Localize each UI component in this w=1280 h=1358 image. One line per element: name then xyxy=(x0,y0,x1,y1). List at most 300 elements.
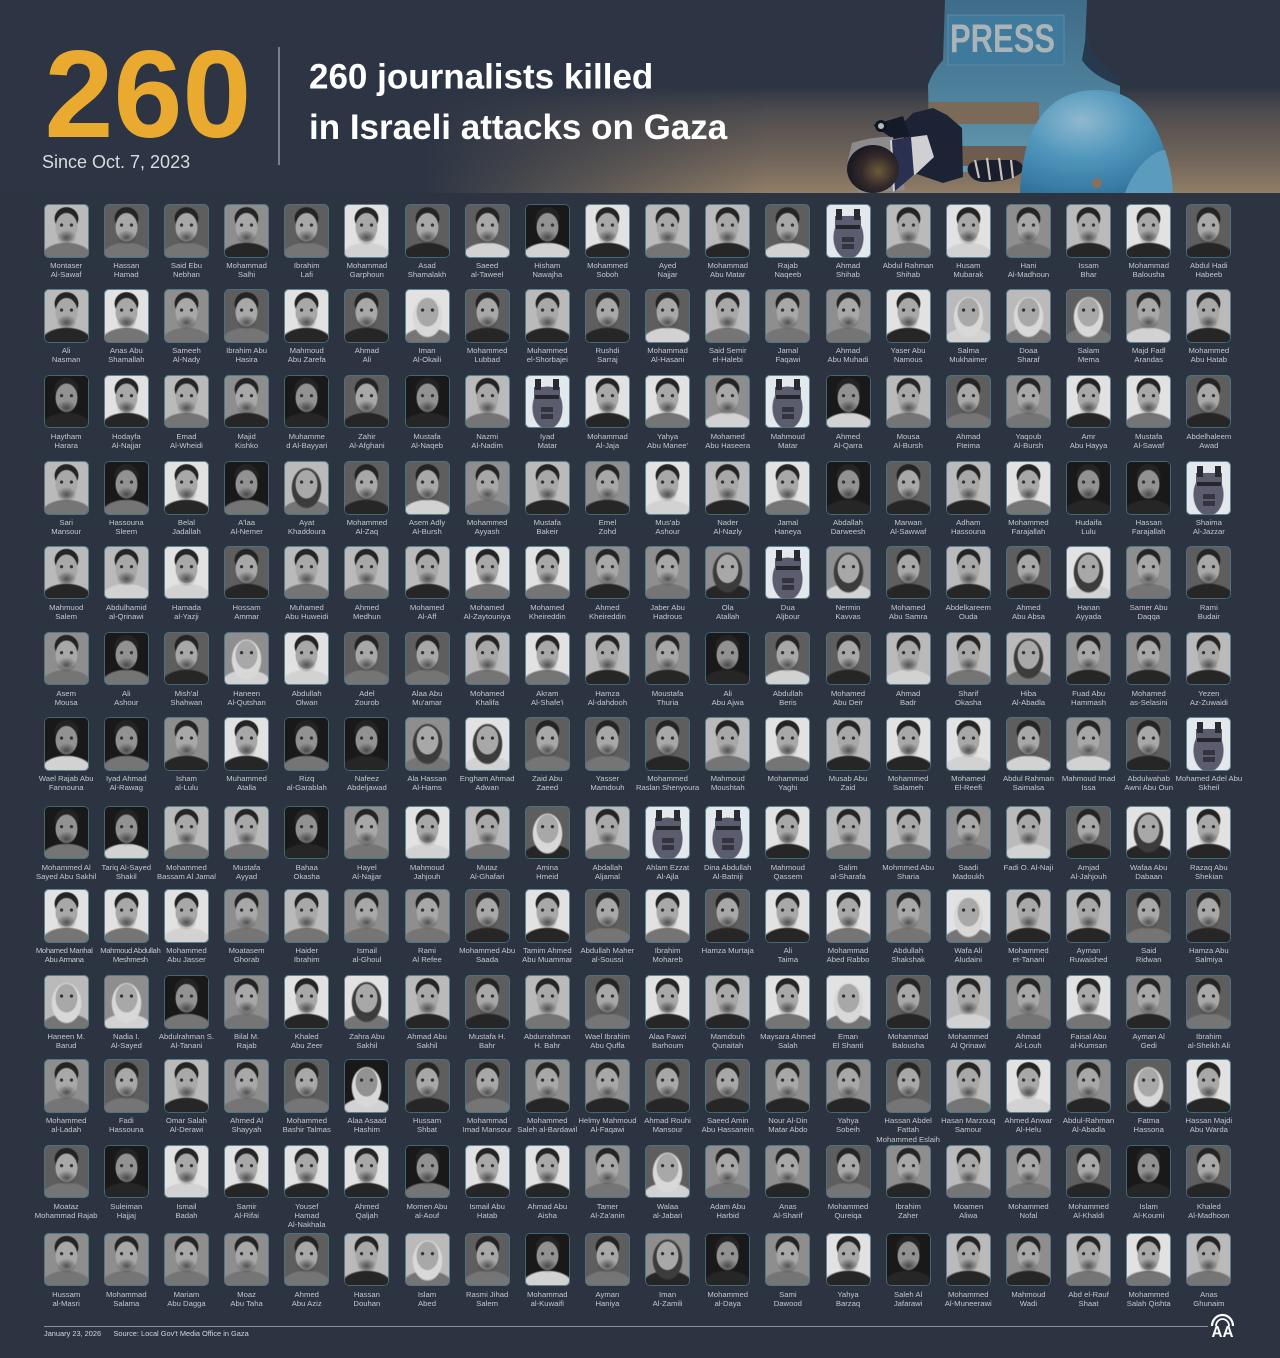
text: Al-Nakhala xyxy=(288,1220,326,1229)
portrait: Mohamed Khalifa: Mohamed xyxy=(470,688,504,698)
text: Al-Abadla xyxy=(1012,698,1045,707)
portrait: Suleiman Hajjaj xyxy=(96,1144,156,1214)
text: Shahwan xyxy=(170,698,202,707)
portrait: Muhamed Abu Huweidi: Muhamed xyxy=(290,602,324,612)
portrait: Abdallah Darweesh: Abdallah xyxy=(833,518,863,527)
portrait: Isham al-Lulu xyxy=(156,717,217,787)
portrait: Shaima Al-Jazzar xyxy=(1179,461,1239,531)
portrait: Moustafa Thuria xyxy=(638,632,698,702)
portrait: Hamada al-Yazji xyxy=(156,546,217,616)
portrait: Mohammad al-Kuwaifi: Mohammad xyxy=(527,1290,568,1298)
text: Farajallah xyxy=(1012,527,1045,536)
portrait: Bilal M. Rajab xyxy=(217,975,277,1045)
text: Sleem xyxy=(115,527,137,536)
portrait: Abd el-Rauf Shaat xyxy=(1058,1232,1119,1302)
portrait: Mahmoud Matar xyxy=(758,374,818,444)
portrait: Anas Abu Shamallah xyxy=(104,289,149,364)
portrait: Ayat Khaddoura xyxy=(277,461,337,531)
portrait: Mohamed as-Selasini xyxy=(1119,632,1179,702)
text: el-Shorbajei xyxy=(527,355,568,364)
portrait: Yasser Mamdouh: Yasser xyxy=(596,774,619,783)
text: Raslan Shenyoura xyxy=(636,783,699,792)
portrait: Abdallah Darweesh xyxy=(818,461,878,531)
portrait: Mohammed Al-Khaldi: Mohammed xyxy=(1068,1202,1109,1210)
text: El Shanti xyxy=(833,1041,863,1050)
portrait: Haytham Harara: Haytham xyxy=(51,432,82,440)
portrait: Mohammed Ayyash xyxy=(457,461,517,531)
portrait: Walaa al-Jabari xyxy=(638,1144,698,1214)
text: Nasman xyxy=(52,355,80,364)
text: et-Tanani xyxy=(1013,955,1044,964)
portrait: Hanan Ayyada: Hanan xyxy=(1077,602,1100,612)
portrait: Mohammed Al-Muneerawi xyxy=(938,1232,998,1302)
text: Sarraj xyxy=(597,355,618,364)
portrait: Tamer Al-Za'anin xyxy=(577,1144,638,1214)
portrait: Hussam al-Masri: Hussam xyxy=(52,1290,80,1298)
text: Abed Rabbo xyxy=(827,955,869,964)
portrait: Jamal Faqawi xyxy=(765,289,810,364)
text: Arandas xyxy=(1134,355,1163,364)
portrait: Mohammed Abu Hatab: Mohammed xyxy=(1189,346,1229,355)
portrait: Mohammad Balousha xyxy=(878,975,938,1045)
text: al-Yazji xyxy=(174,612,199,621)
portrait: Mohammad Yaghi xyxy=(758,717,818,787)
portrait: Iman Al-Zamili: Iman xyxy=(659,1290,676,1298)
portrait: Islam Al-Koumi: Islam xyxy=(1140,1202,1158,1210)
portrait row 4 xyxy=(36,461,1239,531)
text: Ruwaished xyxy=(1070,955,1108,964)
text: Al-Batniji xyxy=(713,872,743,881)
text: Hadrous xyxy=(653,612,682,621)
text: Abu Hatab xyxy=(1191,355,1227,364)
text: Ashour xyxy=(655,527,680,536)
portrait: Ali Nasman xyxy=(44,289,89,364)
portrait: Jamal Faqawi: Jamal xyxy=(778,346,798,355)
portrait: Nafeez Abdeljawad: Nafeez xyxy=(355,774,379,783)
portrait: Amina Hmeid: Amina xyxy=(536,862,558,872)
text: Shakil xyxy=(116,872,137,881)
text: Abu Manee' xyxy=(647,441,688,450)
portrait: Samir Al-Rifai: Samir xyxy=(237,1202,257,1210)
text: Barhoum xyxy=(652,1041,683,1050)
text: Al-Faqawi xyxy=(590,1125,625,1134)
portrait: Fadi Hassouna: Fadi xyxy=(119,1116,134,1125)
text: Soboh xyxy=(596,270,619,279)
portrait: Ahmed Al-Qarra xyxy=(818,374,878,444)
text: al-Masri xyxy=(52,1299,80,1308)
portrait: Rami Budair xyxy=(1179,546,1239,616)
portrait: Mohammed Raslan Shenyoura: Mohammed xyxy=(647,774,688,783)
portrait: Moatasem Ghorab xyxy=(217,889,277,959)
portrait: Haneen Al-Qutshan xyxy=(217,632,277,702)
text: Douhan xyxy=(353,1299,380,1308)
text: Fattah xyxy=(897,1125,919,1134)
text: Mohammad Rajab xyxy=(35,1211,98,1220)
text: Al-Jahjouh xyxy=(1070,872,1107,881)
portrait: Anas Al-Sharif: Anas xyxy=(779,1202,797,1210)
portrait: Anas Ghunaim xyxy=(1179,1232,1239,1302)
text: Abu Muhadi xyxy=(827,355,868,364)
text: al-Soussi xyxy=(592,955,623,964)
portrait: Alaa Fawzi Barhoum: Alaa Fawzi xyxy=(649,1032,686,1041)
portrait: Mohammed Saleh al-Bardawil xyxy=(517,1059,577,1129)
portrait: Mohammed Qureiqa xyxy=(818,1144,878,1214)
portrait: Sari Mansour xyxy=(36,461,96,531)
portrait: Ahmad Fteima xyxy=(938,374,998,444)
text: Fteima xyxy=(957,441,980,450)
portrait: Mohammed Raslan Shenyoura xyxy=(638,717,698,787)
portrait: Abd el-Rauf Shaat: Abd el-Rauf xyxy=(1068,1290,1109,1298)
text: Shihab xyxy=(836,270,860,279)
portrait: Mohammad Al-Hasani xyxy=(645,289,690,364)
portrait: Ismail Badah xyxy=(156,1144,217,1214)
text: Adwan xyxy=(475,783,499,792)
portrait: Ahmad Abu Muhadi xyxy=(826,289,871,364)
portrait: Alaa Asaad Hashim xyxy=(337,1059,397,1129)
text: Aliwa xyxy=(959,1211,977,1220)
portrait: Asem Mousa xyxy=(36,632,96,702)
portrait: Mohammed Al-Zaq: Mohammed xyxy=(347,518,387,527)
portrait: Mohammed Salah Qishta xyxy=(1119,1232,1179,1302)
portrait: Mahmoud Moushtah: Mahmoud xyxy=(711,774,745,783)
portrait: Abdul Rahman Saimalsa xyxy=(998,717,1058,787)
text: Olwan xyxy=(296,698,318,707)
portrait: Iman Al-Okaili: Iman xyxy=(418,346,436,355)
portrait: Salma Mukhaimer: Salma xyxy=(957,346,979,355)
portrait: Ahmad Abu Aisha xyxy=(517,1144,577,1214)
text: Mohammed Eslaih xyxy=(876,1135,940,1144)
text: Al-Koumi xyxy=(1133,1211,1164,1220)
portrait: Asem Adly Al-Bursh xyxy=(397,461,457,531)
portrait: Mohamed Abu Haseera xyxy=(698,374,758,444)
portrait: Iyad Ahmad Al-Rawag: Iyad Ahmad xyxy=(106,774,147,783)
portrait: Mohammed Bassam Al Jamal xyxy=(156,806,217,876)
text: al-Aouf xyxy=(415,1211,439,1220)
portrait: Alaa Fawzi Barhoum xyxy=(638,975,698,1045)
portrait: Yaser Abu Namous xyxy=(886,289,931,364)
portrait: Hassan Douhan xyxy=(337,1232,397,1302)
portrait: Dua Aljbour: Dua xyxy=(781,602,795,612)
portrait: Mohammed Al Sayed Abu Sakhil: Mohammed Al xyxy=(42,862,91,872)
portrait: Nermin Kavvas: Nermin xyxy=(836,602,860,612)
portrait: Ismail Abu Hatab: Ismail Abu xyxy=(469,1202,505,1210)
portrait: Montaser Al-Sawaf: Montaser xyxy=(50,261,82,270)
text: Abu Dagga xyxy=(167,1299,206,1308)
text: Al-Helu xyxy=(1016,1125,1041,1134)
portrait: Yahya Sobeih: Yahya xyxy=(837,1116,859,1125)
portrait: Hamza Murtaja xyxy=(698,889,758,959)
portrait: Zahra Abu Sakhil: Zahra Abu xyxy=(349,1032,385,1041)
portrait: Moatasem Ghorab: Moatasem xyxy=(229,946,265,955)
portrait: Mohammed Lubbad xyxy=(465,289,510,364)
portrait: Yezen Az-Zuwaidi xyxy=(1179,632,1239,702)
portrait: Marwan Al-Sawwaf xyxy=(878,461,938,531)
portrait: Rami Al Refee: Rami xyxy=(418,946,436,955)
portrait: Rami Budair: Rami xyxy=(1200,602,1218,612)
portrait: Muhammed Al-Bayyari xyxy=(277,374,337,444)
portrait: Abdul Hadi Habeeb: Abdul Hadi xyxy=(1190,261,1228,270)
text: Kheireddin xyxy=(589,612,626,621)
text: Hassouna xyxy=(951,527,986,536)
image: helmet xyxy=(1020,90,1173,193)
text: al-Daya xyxy=(714,1299,741,1308)
portrait: Said Ridwan xyxy=(1119,889,1179,959)
portrait: Anas Abu Shamallah: Anas Abu xyxy=(110,346,143,355)
text: Hassouna xyxy=(109,1125,144,1134)
portrait: Abdelkareem Ouda: Abdelkareem xyxy=(946,602,991,612)
portrait: Moustafa Thuria: Moustafa xyxy=(652,688,683,698)
text: Skheil xyxy=(1198,783,1219,792)
text: Salah Qishta xyxy=(1127,1299,1171,1308)
text: Al-Zamili xyxy=(653,1299,683,1308)
text: Aljbour xyxy=(776,612,800,621)
portrait: Hasan Marzouq Samour: Hasan Marzouq xyxy=(941,1116,995,1125)
portrait: Mohammed Salameh: Mohammed xyxy=(888,774,928,783)
text: Medhun xyxy=(353,612,381,621)
portrait: Samer Abu Daqqa xyxy=(1119,546,1179,616)
portrait: Sari Mansour: Sari xyxy=(59,518,73,527)
portrait: Mohammad Al-Hasani: Mohammad xyxy=(647,346,688,355)
portrait: Mohammed Abu Hatab xyxy=(1179,289,1239,359)
text: Al-Muneerawi xyxy=(945,1299,992,1308)
portrait: Ahmed Qaljah xyxy=(337,1144,397,1214)
portrait: Mohammad Garphoun xyxy=(344,204,389,279)
text: Al-Nemer xyxy=(230,527,263,536)
text: Ayyada xyxy=(1076,612,1101,621)
text: Imad Mansour xyxy=(463,1125,512,1134)
portrait: Adam Abu Harbid: Adam Abu xyxy=(710,1202,745,1210)
portrait: Abdullah Olwan xyxy=(277,632,337,702)
portrait: Hodayfa Al-Najjar xyxy=(96,374,156,444)
portrait: Said Ridwan: Said xyxy=(1141,946,1156,955)
portrait: Mahmoud Imad Issa: Mahmoud Imad xyxy=(1062,774,1115,783)
portrait: Mohamed Al-Zaytouniya xyxy=(457,546,517,616)
portrait: Wael Ibrahim Abu Quffa xyxy=(577,975,638,1045)
text: Balousha xyxy=(892,1041,924,1050)
portrait: Akram Al-Shafe'i: Akram xyxy=(536,688,558,698)
text: Badr xyxy=(900,698,916,707)
text: Bhar xyxy=(1080,270,1097,279)
text: Atalla xyxy=(237,783,256,792)
text: Yaghi xyxy=(778,783,797,792)
portrait: Walaa al-Jabari: Walaa xyxy=(657,1202,678,1210)
portrait row 10 xyxy=(36,975,1239,1045)
portrait: Abdul Rahman Shihab xyxy=(882,204,934,279)
portrait: Mohammed et-Tanani xyxy=(998,889,1058,959)
text: Ashour xyxy=(114,698,138,707)
portrait: Mus'ab Ashour: Mus'ab xyxy=(655,518,680,527)
text: Balousha xyxy=(1133,270,1165,279)
portrait: Ayman Al Gedi xyxy=(1119,975,1179,1045)
portrait: Anas Al-Sharif xyxy=(758,1144,818,1214)
portrait: Samer Abu Daqqa: Samer Abu xyxy=(1130,602,1168,612)
portrait: Mohammed al-Daya: Mohammed xyxy=(707,1290,748,1298)
portrait: Mohammed Abu Jasser: Mohammed xyxy=(166,946,207,955)
portrait: Ibrahim Mohareb xyxy=(638,889,698,959)
header banner xyxy=(42,0,1280,193)
text: Barzaq xyxy=(836,1299,860,1308)
portrait: Mustafa H. Bahr: Mustafa H. xyxy=(469,1032,506,1041)
portrait: Yahya Barzaq: Yahya xyxy=(837,1290,859,1298)
portrait: Khaled Abu Zeer xyxy=(277,975,337,1045)
portrait: Ahmad Abu Muhadi: Ahmad xyxy=(836,346,860,355)
portrait: Khaled Abu Zeer: Khaled xyxy=(295,1032,319,1041)
portrait: Mohamed Al-Aff: Mohamed xyxy=(410,602,444,612)
portrait: Marwan Al-Sawwaf: Marwan xyxy=(894,518,922,527)
portrait: Mohammed Abu Jasser xyxy=(156,889,217,959)
portrait: Ayman Haniya: Ayman xyxy=(596,1290,619,1298)
text: Shihab xyxy=(896,270,920,279)
text: Jadallah xyxy=(172,527,201,536)
portrait: Ayed Najjar: Ayed xyxy=(659,261,676,270)
portrait: Mohamed Khalifa xyxy=(457,632,517,702)
portrait: Zaid Abu Zaeed xyxy=(517,717,577,787)
portrait: Maysara Ahmed Salah: Maysara Ahmed xyxy=(760,1032,816,1041)
portrait: Moataz Mohammad Rajab: Moataz xyxy=(54,1202,79,1210)
portrait: Wael Ibrahim Abu Quffa: Wael Ibrahim xyxy=(585,1032,630,1041)
text: el-Halebi xyxy=(713,355,743,364)
portrait: Hussam al-Masri xyxy=(36,1232,96,1302)
portrait: Rushdi Sarraj: Rushdi xyxy=(595,346,619,355)
portrait: Abdallah Aljamal xyxy=(577,806,638,876)
portrait: Mohammed Farajallah xyxy=(998,461,1058,531)
portrait: Mohammad Yaghi: Mohammad xyxy=(768,774,808,783)
portrait: Ayman Haniya xyxy=(577,1232,638,1302)
text: Issa xyxy=(1082,783,1096,792)
text: Daqqa xyxy=(1137,612,1160,621)
portrait: Mohamed Abu Deir xyxy=(818,632,878,702)
portrait: Mohamed Abu Deir: Mohamed xyxy=(831,688,865,698)
portrait: Ahmad Badr xyxy=(878,632,938,702)
text: Zourob xyxy=(355,698,379,707)
portrait: Musab Abu Zaid: Musab Abu xyxy=(829,774,867,783)
portrait: Hani Al-Madhoun xyxy=(1006,204,1051,279)
text: Dabaan xyxy=(1135,872,1162,881)
portrait: Mohamed Abu Samra: Mohamed xyxy=(891,602,925,612)
text: Atallah xyxy=(716,612,739,621)
portrait: Abdulrahman S. Al-Tanani xyxy=(156,975,217,1045)
portrait: Ali Nasman: Ali xyxy=(62,346,70,355)
text: Fannouna xyxy=(49,783,83,792)
text: Bassam Al Jamal xyxy=(157,872,216,881)
text: Salem xyxy=(55,612,77,621)
text: Abu Zeer xyxy=(291,1041,323,1050)
portrait: Ahmed Qaljah: Ahmed xyxy=(355,1202,379,1210)
portrait: Rizq al-Garablah: Rizq xyxy=(299,774,314,783)
portrait: Ahmad Al-Louh: Ahmad xyxy=(1016,1032,1041,1041)
portrait: Ahmed Abu Aziz xyxy=(277,1232,337,1302)
portrait: Mahmoud Jahjouh: Mahmoud xyxy=(410,862,444,872)
image: press vest xyxy=(928,0,1120,172)
portrait: Mohamed El-Reefi: Mohamed xyxy=(951,774,985,783)
portrait: Mohammed Bashir Talmas: Mohammed xyxy=(286,1116,327,1125)
portrait: Rajab Naqeeb: Rajab xyxy=(778,261,798,270)
portrait: Rajab Naqeeb xyxy=(765,204,810,279)
text: Awni Abu Oun xyxy=(1124,783,1173,792)
portrait: Ayed Najjar xyxy=(645,204,690,279)
portrait: Wafaa Abu Dabaan: Wafaa Abu xyxy=(1130,862,1167,872)
portrait: Yousef Hamad Al-Nakhala: Yousef xyxy=(295,1202,318,1210)
text: Mansour xyxy=(51,527,81,536)
text: al-Lulu xyxy=(175,783,198,792)
portrait: Mahmoud Qassem: Mahmoud xyxy=(771,862,805,872)
portrait: Ahmad Abu Aisha: Ahmad Abu xyxy=(527,1202,567,1210)
text: Nebhan xyxy=(173,270,200,279)
text: Sharaf xyxy=(1017,355,1040,364)
portrait: Islam Abed xyxy=(397,1232,457,1302)
portrait: Wafa Ali Aludaini xyxy=(938,889,998,959)
portrait: Ibrahim Abu Hasira xyxy=(224,289,269,364)
portrait: Ahmad Shihab: Ahmad xyxy=(836,261,860,270)
portrait: Adel Zourob: Adel xyxy=(359,688,375,698)
portrait: Emad Al-Wheidi xyxy=(156,374,217,444)
text: Rajab xyxy=(237,1041,257,1050)
text: Taima xyxy=(778,955,798,964)
portrait: Ahmad Al-Louh xyxy=(998,975,1058,1045)
portrait: Salma Mukhaimer xyxy=(946,289,991,364)
portrait: Mahmoud Jahjouh xyxy=(397,806,457,876)
text: Al-Nazly xyxy=(713,527,742,536)
text: Al-Najjar xyxy=(112,441,141,450)
portrait: Abdullah Maher al-Soussi xyxy=(577,889,638,959)
portrait: Mohammed Al-Muneerawi: Mohammed xyxy=(948,1290,989,1298)
portrait: Moaz Abu Taha: Moaz xyxy=(237,1290,256,1298)
text: Zaher xyxy=(898,1211,918,1220)
portrait: Mustafa H. Bahr xyxy=(457,975,517,1045)
portrait: Hassouna Sleem xyxy=(96,461,156,531)
portrait: Mohammad Balousha: Mohammad xyxy=(1128,261,1169,270)
portrait: Muhammed Al-Bayyari: Muhamme xyxy=(289,432,325,440)
text: Aljamal xyxy=(595,872,620,881)
text: Al-Najjar xyxy=(352,872,382,881)
portrait: Mustafa Bakeir: Mustafa xyxy=(534,518,561,527)
portrait: Mahmoud Moushtah xyxy=(698,717,758,787)
portrait row 3 xyxy=(36,374,1239,444)
portrait: Ahmad Rouhi Mansour: Ahmad Rouhi xyxy=(644,1116,691,1125)
text: Al-Sawwaf xyxy=(890,527,926,536)
text: Al-Qutshan xyxy=(227,698,266,707)
text: Al-Nadim xyxy=(471,441,503,450)
text: Ali xyxy=(363,355,371,364)
portrait: Fadi O. Al-Naji xyxy=(998,806,1058,876)
portrait: Mohammad Salama: Mohammad xyxy=(106,1290,147,1298)
portrait: Fatma Hassona xyxy=(1119,1059,1179,1129)
portrait: Hayel Al-Najjar xyxy=(337,806,397,876)
portrait: Salam Mema: Salam xyxy=(1078,346,1099,355)
portrait: Mish'al Shahwan xyxy=(156,632,217,702)
portrait: Mamdouh Qunaitah xyxy=(698,975,758,1045)
text: Al-Jazzar xyxy=(1193,527,1225,536)
portrait: Ibrahim Zaher: Ibrahim xyxy=(895,1202,921,1210)
portrait: Rushdi Sarraj xyxy=(585,289,630,364)
portrait: Ola Atallah: Ola xyxy=(722,602,734,612)
portrait: Eman El Shanti xyxy=(818,975,878,1045)
portrait: Mustafa Al-Sawaf: Mustafa xyxy=(1135,432,1162,440)
portrait: Abdallah Aljamal: Abdallah xyxy=(592,862,622,872)
portrait: Mohmmed Abu Sharia: Mohmmed Abu xyxy=(882,862,934,872)
portrait: Adel Zourob xyxy=(337,632,397,702)
text: Shamalakh xyxy=(408,270,446,279)
portrait: Belal Jadallah xyxy=(156,461,217,531)
portrait: Adham Hassouna: Adham xyxy=(956,518,980,527)
portrait: Ahmed Al Shayyah: Ahmed Al xyxy=(230,1116,263,1125)
portrait: Hussam Shbat xyxy=(397,1059,457,1129)
text: Ridwan xyxy=(1136,955,1162,964)
portrait: Haneen M. Barud xyxy=(36,975,96,1045)
text: Kheireddin xyxy=(529,612,566,621)
text: Mubarak xyxy=(953,270,983,279)
portrait: Bahaa Okasha: Bahaa xyxy=(296,862,318,872)
